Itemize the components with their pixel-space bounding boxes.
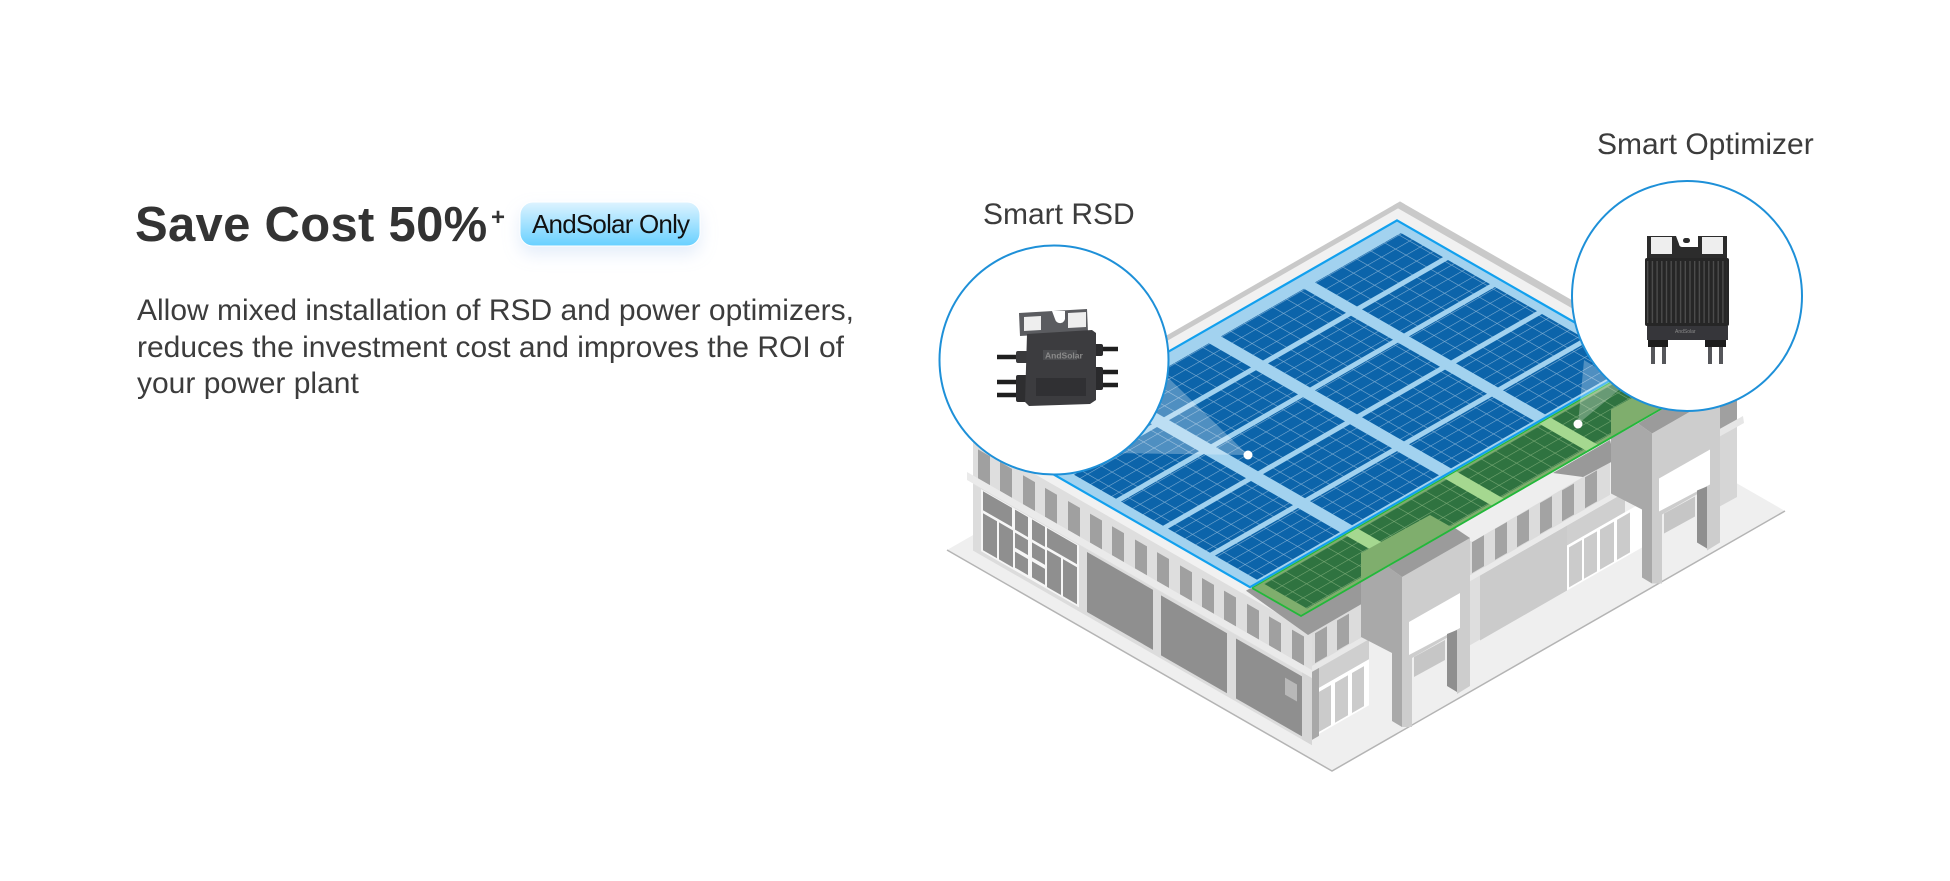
green optimizer zone bbox=[1252, 363, 1694, 616]
right end wing bbox=[1716, 400, 1744, 508]
marker dot: Smart Optimizer bbox=[1574, 420, 1582, 428]
ground plate bbox=[947, 290, 1785, 771]
label: Smart Optimizer: Smart Optimizer bbox=[1597, 128, 1814, 161]
green zone outline bbox=[1252, 362, 1694, 616]
icon: optimizer device: AndSolar bbox=[1675, 329, 1696, 335]
right facade bbox=[1312, 442, 1642, 740]
description text: your power plant bbox=[137, 367, 359, 400]
light beam: Smart Optimizer bbox=[1578, 360, 1625, 424]
icon: optimizer device bbox=[1645, 236, 1729, 364]
illustration: isometric building bbox=[947, 201, 1785, 771]
heading: Save Cost 50% bbox=[135, 198, 488, 252]
roof soffit and terrace bbox=[1245, 440, 1615, 635]
callout: Smart RSD bbox=[940, 246, 1168, 474]
tower 2 bbox=[1611, 372, 1720, 584]
blue RSD zone bbox=[1004, 220, 1643, 587]
tower 1 bbox=[1361, 515, 1470, 727]
description text bbox=[137, 294, 854, 400]
left facade bbox=[967, 435, 1312, 745]
description text: Allow mixed installation of RSD and power optimizers, bbox=[137, 294, 854, 327]
marker dot: Smart RSD bbox=[1244, 450, 1252, 460]
icon: RSD device: AndSolar bbox=[1045, 350, 1083, 360]
description text: reduces the investment cost and improves the ROI of bbox=[137, 331, 845, 364]
label: Smart RSD: Smart RSD bbox=[983, 198, 1135, 231]
badge: AndSolar Only bbox=[520, 202, 700, 246]
heading: + bbox=[491, 204, 505, 231]
icon: RSD device bbox=[997, 309, 1118, 406]
callout: Smart Optimizer bbox=[1572, 181, 1802, 411]
roof with solar panels bbox=[980, 201, 1712, 622]
badge: AndSolar Only: AndSolar Only bbox=[532, 209, 690, 239]
light beam: Smart RSD bbox=[1110, 360, 1248, 455]
roof slab bbox=[980, 201, 1662, 593]
